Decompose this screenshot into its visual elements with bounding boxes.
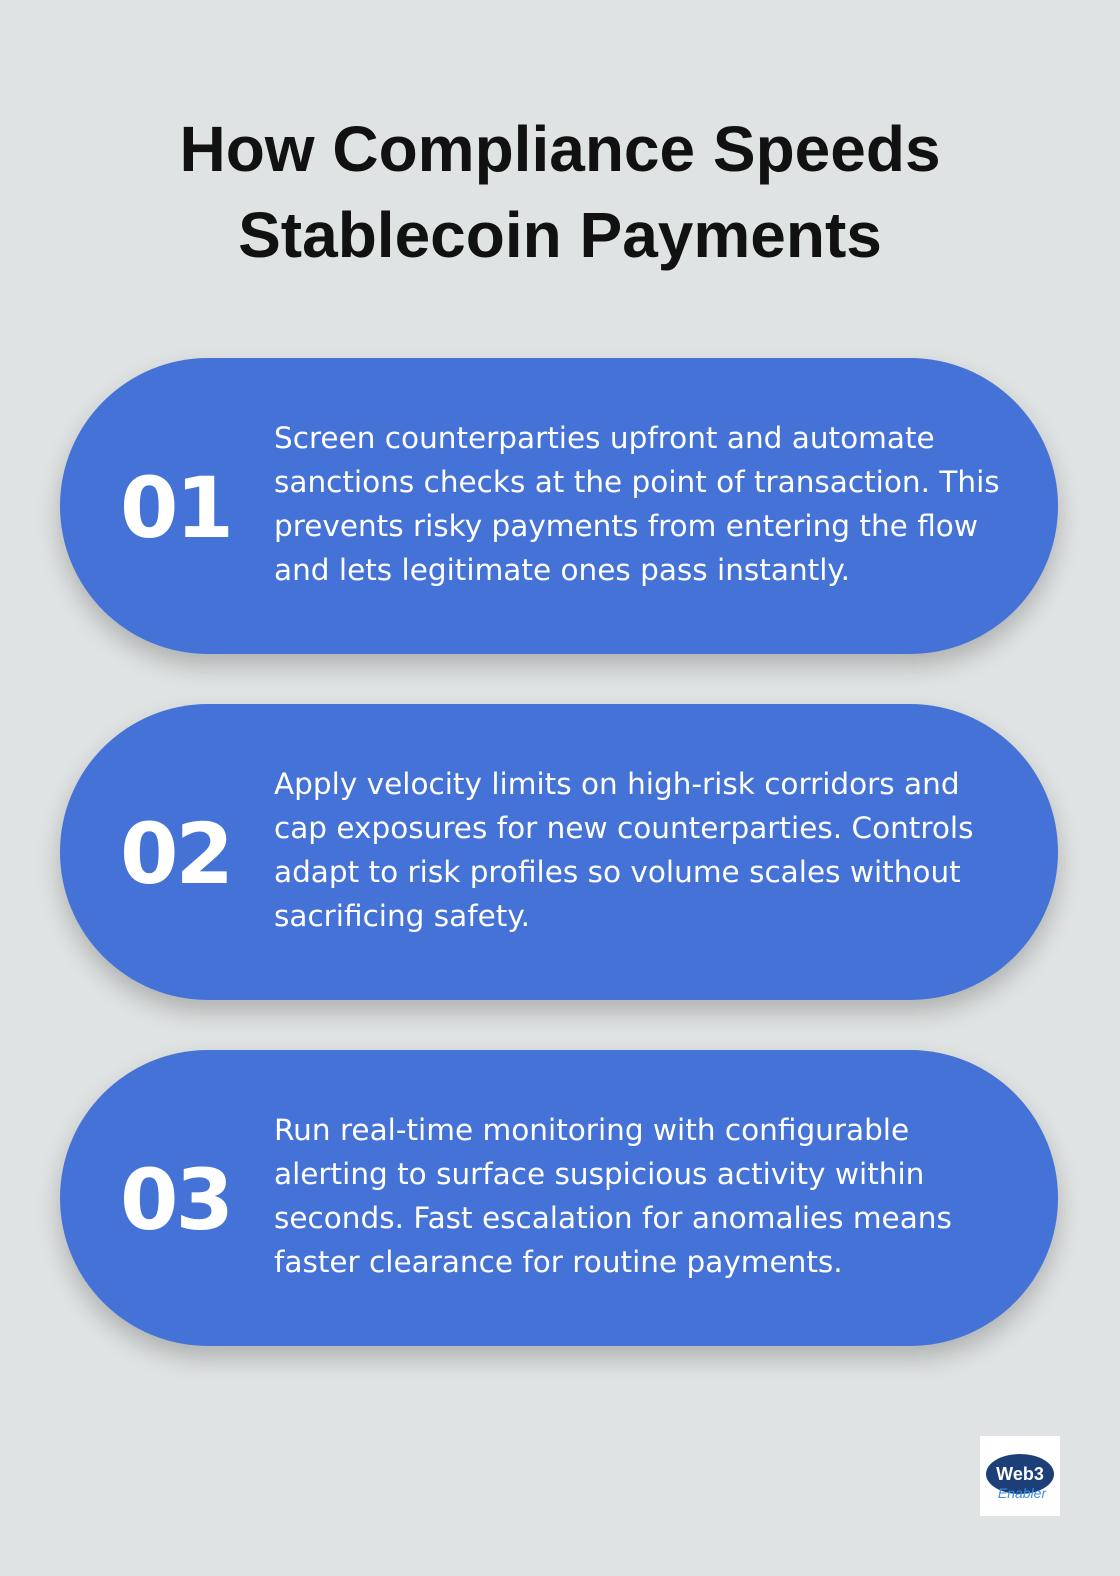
text 02 bbox=[274, 767, 973, 933]
text 01: and lets legitimate ones pass instantly. bbox=[274, 553, 850, 587]
number 03: 03 bbox=[120, 1151, 231, 1249]
panel: step 02 bbox=[60, 704, 1058, 1000]
text 02: adapt to risk profiles so volume scales without bbox=[274, 855, 961, 889]
text 03: faster clearance for routine payments. bbox=[274, 1245, 843, 1279]
number 01: 01 bbox=[120, 459, 231, 557]
text 01: sanctions checks at the point of transaction. This bbox=[274, 465, 1000, 499]
text 03 bbox=[274, 1113, 952, 1279]
logo: Web3 bbox=[996, 1464, 1044, 1484]
title bbox=[179, 113, 941, 271]
text 02: cap exposures for new counterparties. Controls bbox=[274, 811, 973, 845]
text 03: seconds. Fast escalation for anomalies means bbox=[274, 1201, 952, 1235]
logo bbox=[980, 1436, 1060, 1516]
text 01: prevents risky payments from entering the flow bbox=[274, 509, 978, 543]
title: How Compliance Speeds bbox=[179, 113, 941, 185]
number 02: 02 bbox=[120, 805, 231, 903]
panel: step 03 bbox=[60, 1050, 1058, 1346]
text 01 bbox=[274, 421, 1000, 587]
text 02: Apply velocity limits on high-risk corridors and bbox=[274, 767, 960, 801]
text 01: Screen counterparties upfront and automate bbox=[274, 421, 935, 455]
text 02: sacrificing safety. bbox=[274, 899, 530, 933]
panel: step 01 bbox=[60, 358, 1058, 654]
logo: Enabler bbox=[998, 1485, 1047, 1501]
text 03: Run real-time monitoring with configurable bbox=[274, 1113, 909, 1147]
text 03: alerting to surface suspicious activity within bbox=[274, 1157, 924, 1191]
title: Stablecoin Payments bbox=[238, 199, 882, 271]
